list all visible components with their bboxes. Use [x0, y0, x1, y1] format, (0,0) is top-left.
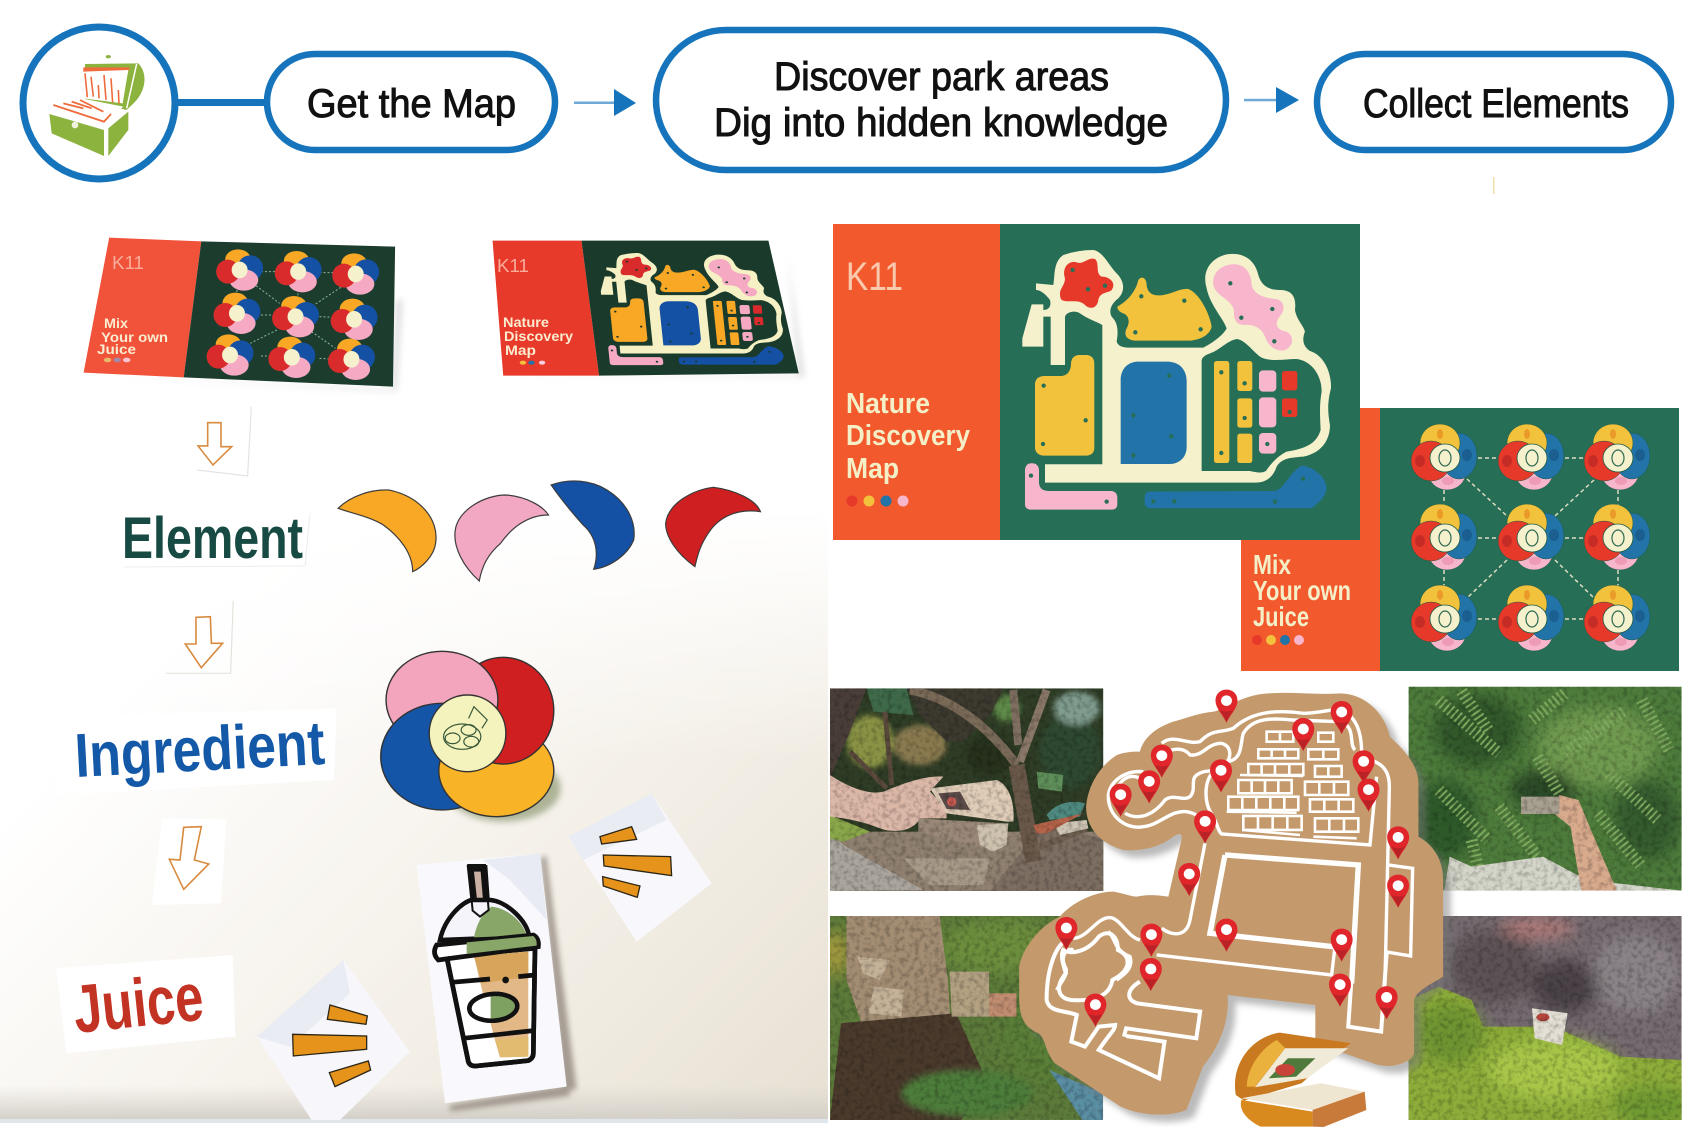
petal: red	[666, 487, 760, 567]
photo card: Mix Your own Juice: Mix	[104, 315, 128, 331]
card: Nature Discovery Map: Map	[846, 453, 899, 485]
photo card: Mix Your own Juice: K11	[112, 253, 144, 273]
photo card: Nature Discovery Map: K11	[497, 256, 529, 276]
paper: burst bottom	[257, 960, 410, 1120]
step: Collect Elements	[1317, 54, 1671, 150]
photo card: Mix Your own Juice: Your own	[101, 329, 168, 345]
step: Discover park areas: Dig into hidden knowledge	[714, 101, 1168, 145]
photo: card in bushes	[1409, 916, 1690, 1127]
photo: palm trunk and stump	[822, 916, 1103, 1120]
juice cup and burst papers	[257, 793, 712, 1120]
label: Element: Element	[122, 506, 303, 571]
step: Discover park areas	[656, 30, 1226, 170]
icon: open log book	[1235, 1033, 1366, 1127]
step: Get the Map	[267, 54, 555, 150]
card: Nature Discovery Map	[833, 224, 1360, 540]
label: Ingredient: Ingredient	[73, 709, 326, 791]
petal: blue	[551, 481, 634, 569]
panel: K11 digital cards	[833, 224, 1679, 671]
element petals	[338, 481, 760, 581]
label: Juice: Juice	[70, 959, 207, 1048]
photo: hand in ferns	[1409, 687, 1682, 891]
photo card: Nature Discovery Map: Discovery	[504, 328, 573, 344]
card: Mix Your own Juice: Juice	[1253, 601, 1309, 632]
map upper paths and buildings	[1057, 709, 1413, 990]
connector line	[176, 99, 268, 106]
card: Mix Your own Juice: Mix	[1253, 549, 1291, 580]
paper: cup card	[417, 853, 573, 1108]
step: Discover park areas: Discover park areas	[774, 55, 1109, 99]
map lower paths	[1047, 933, 1387, 1078]
icon: down arrow 3 on paper	[152, 818, 226, 905]
paper: burst top	[568, 793, 712, 942]
map pins	[1055, 690, 1409, 1027]
card: Mix Your own Juice: Your own	[1253, 575, 1351, 606]
photo card: Nature Discovery Map: Nature	[503, 314, 549, 330]
petal: pink	[455, 495, 548, 581]
photo card: Nature Discovery Map	[493, 241, 804, 377]
ingredient flower	[381, 651, 561, 822]
step: Collect Elements: Collect Elements	[1363, 82, 1629, 126]
icon: treasure chest in circle	[23, 27, 175, 179]
arrow	[1244, 87, 1299, 113]
photo card: Nature Discovery Map: Map	[505, 342, 536, 358]
card: Nature Discovery Map: K11	[846, 255, 903, 299]
photo: hand opening log box	[830, 688, 1103, 891]
icon: down arrow 1 on paper	[197, 407, 251, 476]
card: Mix Your own Juice	[1241, 408, 1679, 671]
petal: yellow	[338, 490, 436, 572]
photo card: Mix Your own Juice	[84, 238, 402, 392]
card: Nature Discovery Map: Nature	[846, 388, 930, 420]
step: Get the Map: Get the Map	[307, 82, 516, 126]
left photo background wall	[0, 200, 828, 1123]
photo card: Mix Your own Juice: Juice	[97, 341, 136, 357]
park map	[1019, 690, 1451, 1127]
card: Nature Discovery Map: Discovery	[846, 420, 970, 452]
icon: down arrow 2 on paper	[166, 601, 233, 673]
arrow	[574, 89, 636, 116]
